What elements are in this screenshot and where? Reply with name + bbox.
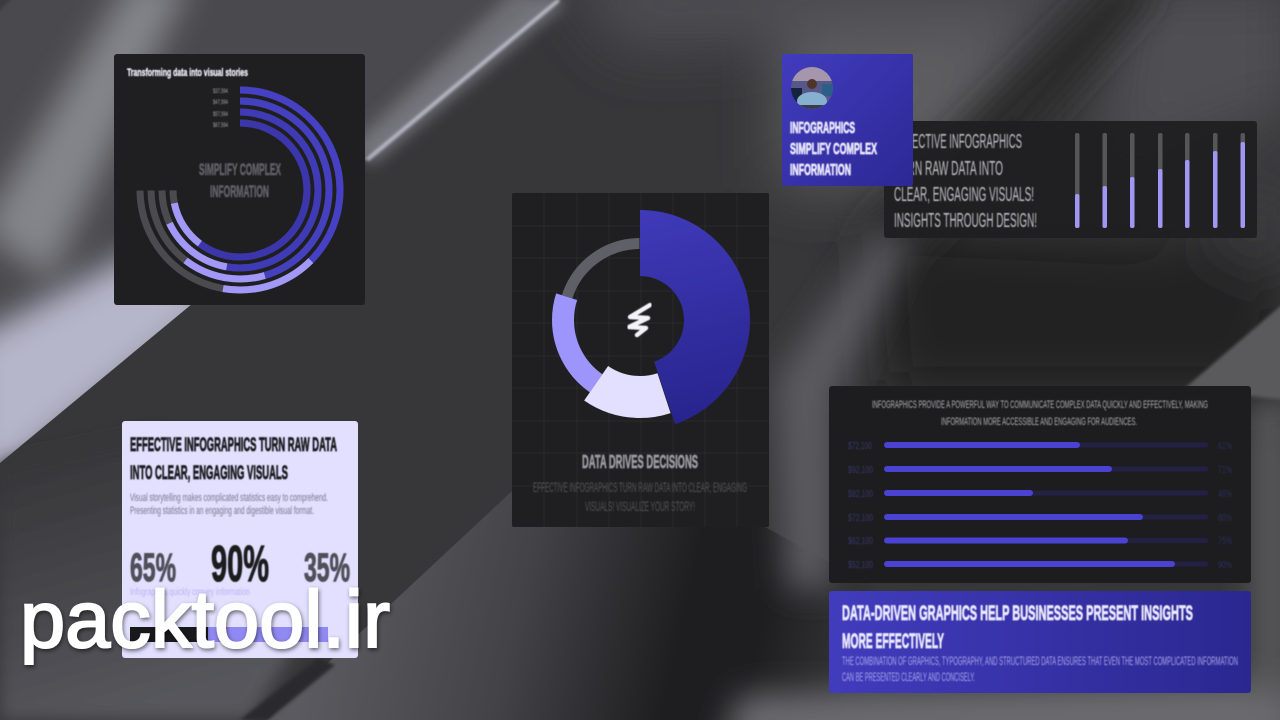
stat: 65%: 65% — [130, 546, 176, 590]
bar labels left — [848, 441, 873, 571]
panel: horizontal bars — [829, 386, 1251, 583]
bar labels right: 75% — [1218, 536, 1232, 547]
panel: blue insight banner — [829, 591, 1251, 693]
intro text — [872, 399, 1208, 428]
card heading: SIMPLIFY COMPLEX — [790, 141, 877, 158]
lower left floor plane — [0, 430, 300, 720]
panel: blue profile card — [782, 54, 913, 186]
panel: light stats card: EFFECTIVE INFOGRAPHICS TURN RAW DATA — [130, 435, 337, 456]
ring labels: $37,594 — [213, 89, 228, 95]
banner description — [842, 654, 1238, 684]
banner description: CAN BE PRESENTED CLEARLY AND CONCISELY. — [842, 670, 975, 684]
bar labels right: 61% — [1218, 441, 1232, 452]
panel: concentric radial chart: SIMPLIFY COMPLEX — [199, 160, 281, 179]
donut description — [533, 479, 747, 514]
banner heading — [842, 602, 1193, 653]
stats description: Visual storytelling makes complicated statistics easy to comprehend. — [130, 492, 328, 504]
column tracks — [1075, 133, 1245, 228]
center caption: INFORMATION — [210, 182, 269, 201]
panel: concentric radial chart — [114, 54, 365, 305]
bar labels left: $62,100 — [848, 536, 873, 547]
statement text: CLEAR, ENGAGING VISUALS! — [894, 184, 1034, 206]
ring labels — [213, 89, 228, 129]
ring labels: $47,594 — [213, 100, 228, 106]
bar labels right: 90% — [1218, 560, 1232, 571]
bar labels right — [1218, 441, 1232, 571]
column fills — [1075, 142, 1245, 228]
ridge glow — [367, 0, 559, 160]
panel title: Transforming data into visual stories — [127, 67, 248, 79]
stats heading — [130, 435, 337, 484]
bar labels right: 71% — [1218, 465, 1232, 476]
panel: bar columns with statement — [884, 121, 1257, 238]
panel: light stats card — [122, 421, 358, 658]
text: EFFECTIVE INFOGRAPHICS TURN RAW DATA INTO CLEAR, ENGAGING — [533, 479, 747, 495]
stat: 35%: 35% — [304, 546, 350, 590]
donut segments — [563, 243, 717, 397]
statement text: EFFECTIVE INFOGRAPHICS — [894, 131, 1022, 153]
bar tracks — [884, 442, 1208, 566]
stats heading: INTO CLEAR, ENGAGING VISUALS — [130, 463, 288, 484]
ring labels: $57,594 — [213, 112, 228, 118]
stats note: Infographics quickly convey information — [130, 587, 250, 598]
ring labels: $67,594 — [213, 123, 228, 129]
panel: bar columns with statement: INSIGHTS THROUGH DESIGN! — [894, 210, 1037, 232]
bar labels left: $82,100 — [848, 489, 873, 500]
card heading — [790, 120, 877, 179]
bar labels right: 80% — [1218, 513, 1232, 524]
bar labels left: $52,100 — [848, 560, 873, 571]
donut description: VISUALS! VISUALIZE YOUR STORY! — [585, 498, 695, 514]
banner heading: MORE EFFECTIVELY — [842, 630, 944, 653]
stat: 90%: 90% — [211, 535, 269, 592]
card heading: INFOGRAPHICS — [790, 120, 855, 137]
avatar photo — [791, 67, 833, 109]
center caption — [199, 160, 281, 201]
upper left fold — [0, 0, 558, 463]
bar labels left: $92,100 — [848, 465, 873, 476]
donut heading: DATA DRIVES DECISIONS — [582, 452, 698, 472]
bar labels right: 46% — [1218, 489, 1232, 500]
watermark: packtool.ir — [20, 575, 390, 665]
statement text — [894, 131, 1037, 232]
progress bar — [130, 627, 328, 642]
ridge highlight — [367, 0, 559, 160]
stats description: Presenting statistics in an engaging and digestible visual format. — [130, 505, 314, 517]
bar labels left: $72,100 — [848, 441, 872, 452]
statement text: TURN RAW DATA INTO — [894, 158, 1003, 180]
card heading: INFORMATION — [790, 162, 851, 179]
panel: central donut chart — [512, 193, 769, 527]
bar fills — [884, 442, 1175, 567]
stats description — [130, 492, 328, 517]
radial rings — [140, 90, 340, 290]
bottom crease — [240, 658, 335, 720]
bar labels left: $72,100 — [848, 513, 873, 524]
icon: squiggle logo — [629, 305, 650, 335]
